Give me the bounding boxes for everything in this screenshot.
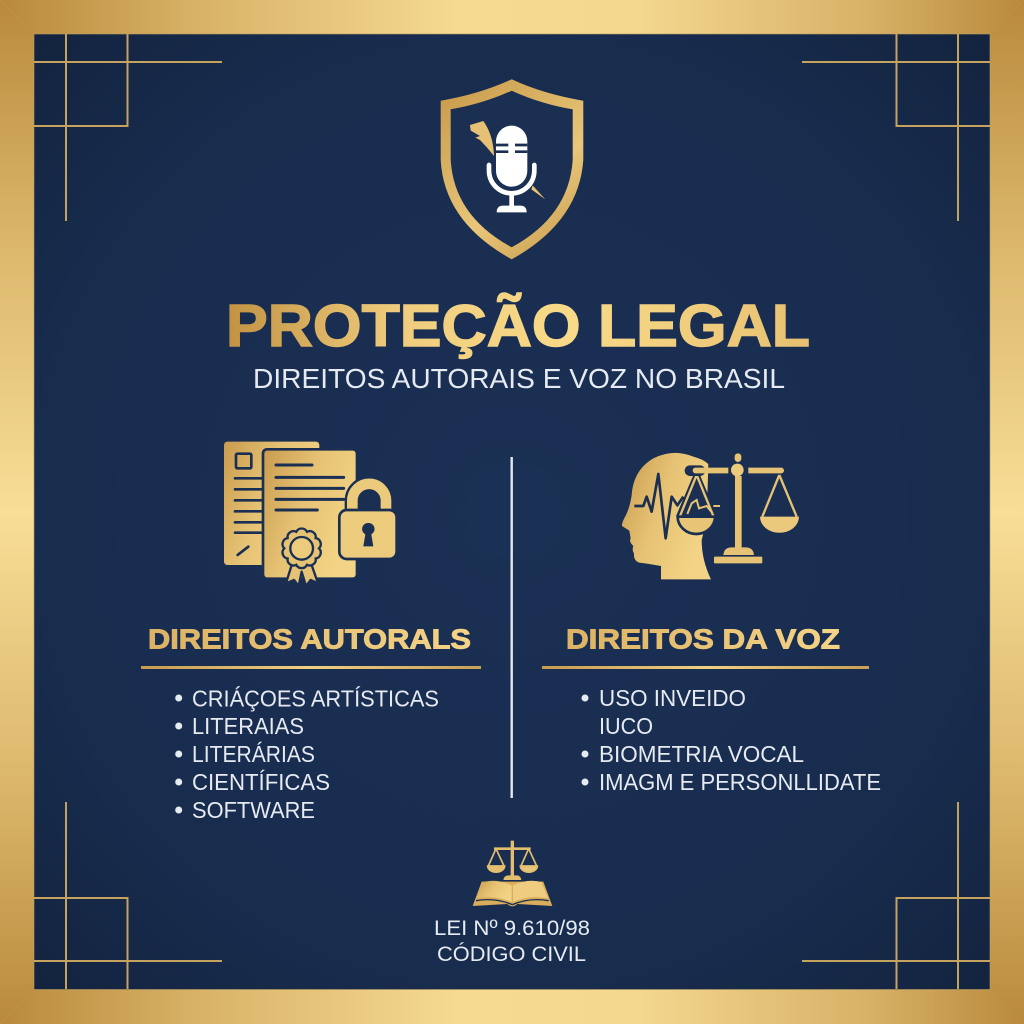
heading: DIREITOS AUTORALS xyxy=(148,624,471,654)
seal xyxy=(283,529,321,586)
title: PROTEÇÃO LEGAL xyxy=(226,293,810,359)
footer: legal references xyxy=(434,916,590,966)
head xyxy=(622,453,711,579)
footer: legal references: CÓDIGO CIVIL xyxy=(437,941,586,966)
icon: head with voice wave and scales xyxy=(622,453,799,579)
divider xyxy=(510,457,513,798)
heading rule xyxy=(141,666,481,669)
list: CRIÁÇOES ARTÍSTICAS xyxy=(192,686,439,712)
corner ornament: top right xyxy=(802,34,990,221)
list: IMAGM E PERSONLLIDATE xyxy=(599,769,881,795)
panel: direitos da voz xyxy=(542,624,881,795)
feather xyxy=(470,121,545,199)
front document xyxy=(263,449,357,579)
microphone xyxy=(489,126,534,212)
list: LITERÁRIAS xyxy=(192,741,315,767)
list: LITERAIAS xyxy=(192,713,304,739)
heading rule xyxy=(542,666,869,669)
list: BIOMETRIA VOCAL xyxy=(599,741,804,767)
list: CIENTÍFICAS xyxy=(192,769,330,795)
subtitle: DIREITOS AUTORAIS E VOZ NO BRASIL xyxy=(253,363,785,394)
heading: DIREITOS DA VOZ xyxy=(566,624,840,654)
panel: direitos autorais xyxy=(141,624,481,823)
icon: shield with microphone and feather xyxy=(441,79,583,259)
voice wave xyxy=(634,474,683,538)
corner ornament: bottom left xyxy=(34,802,222,989)
icon: documents, seal and padlock xyxy=(224,442,397,586)
list: SOFTWARE xyxy=(192,797,315,823)
padlock xyxy=(339,484,397,559)
open book xyxy=(473,881,552,906)
list: IUCO xyxy=(599,713,653,739)
list xyxy=(175,686,439,823)
icon: scales over open book xyxy=(473,841,552,906)
scales xyxy=(678,453,799,563)
list: USO INVEIDO xyxy=(599,685,746,711)
corner ornament: top left xyxy=(34,34,222,221)
footer: legal references: LEI Nº 9.610/98 xyxy=(434,916,590,940)
small scales xyxy=(488,841,537,880)
list xyxy=(582,685,881,795)
back document xyxy=(224,442,319,565)
corner ornament: bottom right xyxy=(802,802,990,989)
